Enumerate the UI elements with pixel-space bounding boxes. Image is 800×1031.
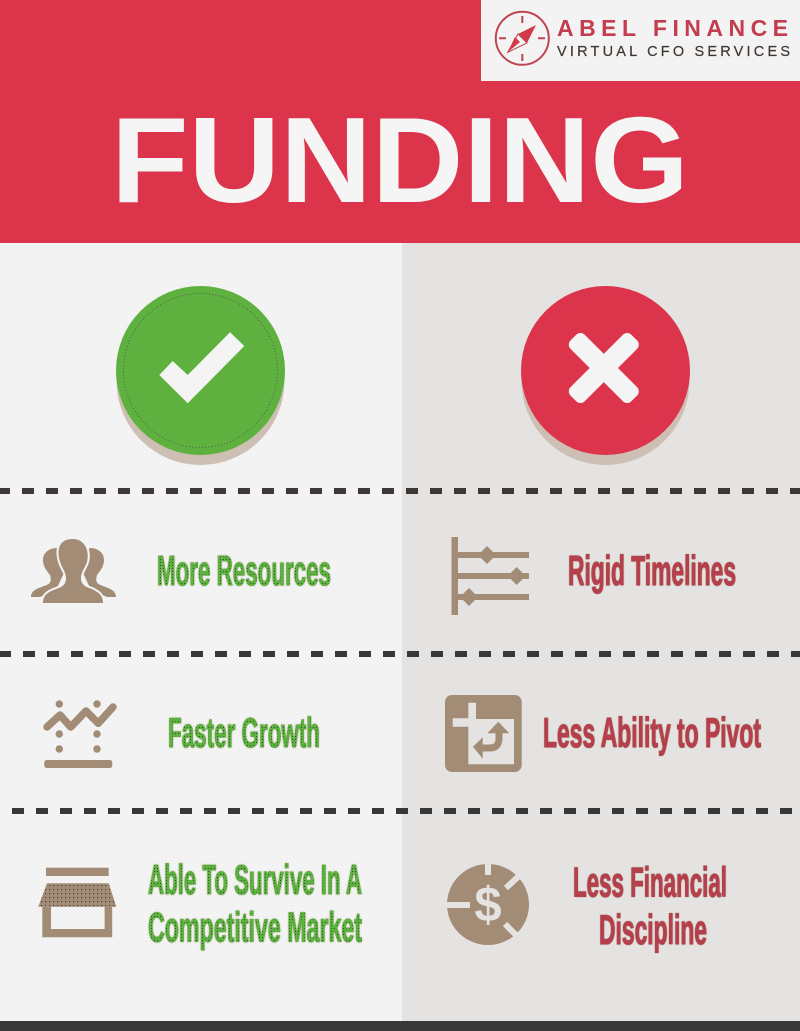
logo name: ABEL FINANCE (557, 15, 788, 41)
panel: cons background (402, 243, 800, 1021)
icon: storefront (38, 868, 116, 937)
icon: green check badge (116, 286, 285, 465)
label: More Resources (157, 547, 331, 594)
icon: people (31, 539, 116, 603)
icon: dollar coin: $ (474, 878, 502, 932)
dashed divider 3 (12, 808, 800, 814)
panel: pros background (0, 243, 402, 1021)
footer band (0, 1021, 800, 1031)
header band (0, 0, 800, 243)
title: FUNDING (111, 92, 689, 228)
logo: Abel Finance (481, 0, 800, 81)
row: Less Financial Discipline (445, 859, 727, 953)
label line 2: Discipline (599, 906, 707, 953)
row: Faster Growth (44, 700, 320, 768)
icon: crop and pivot (445, 695, 522, 772)
dashed divider 2 (0, 651, 800, 657)
icon: timeline sliders (452, 537, 529, 615)
label line 1: Able To Survive In A (148, 856, 362, 903)
icon: compass (496, 12, 549, 65)
icon: red cross badge (521, 286, 690, 465)
dashed divider 1 (0, 488, 800, 494)
row: More Resources (31, 539, 331, 603)
row: Less Ability to Pivot (445, 695, 761, 772)
logo tagline: VIRTUAL CFO SERVICES (557, 44, 790, 60)
label: Faster Growth (168, 709, 320, 756)
icon: dollar coin (445, 862, 529, 945)
row: Able To Survive In A Competitive Market (38, 856, 362, 951)
icon: growth chart (44, 700, 113, 768)
row: Rigid Timelines (452, 537, 736, 615)
label line 2: Competitive Market (148, 904, 362, 951)
